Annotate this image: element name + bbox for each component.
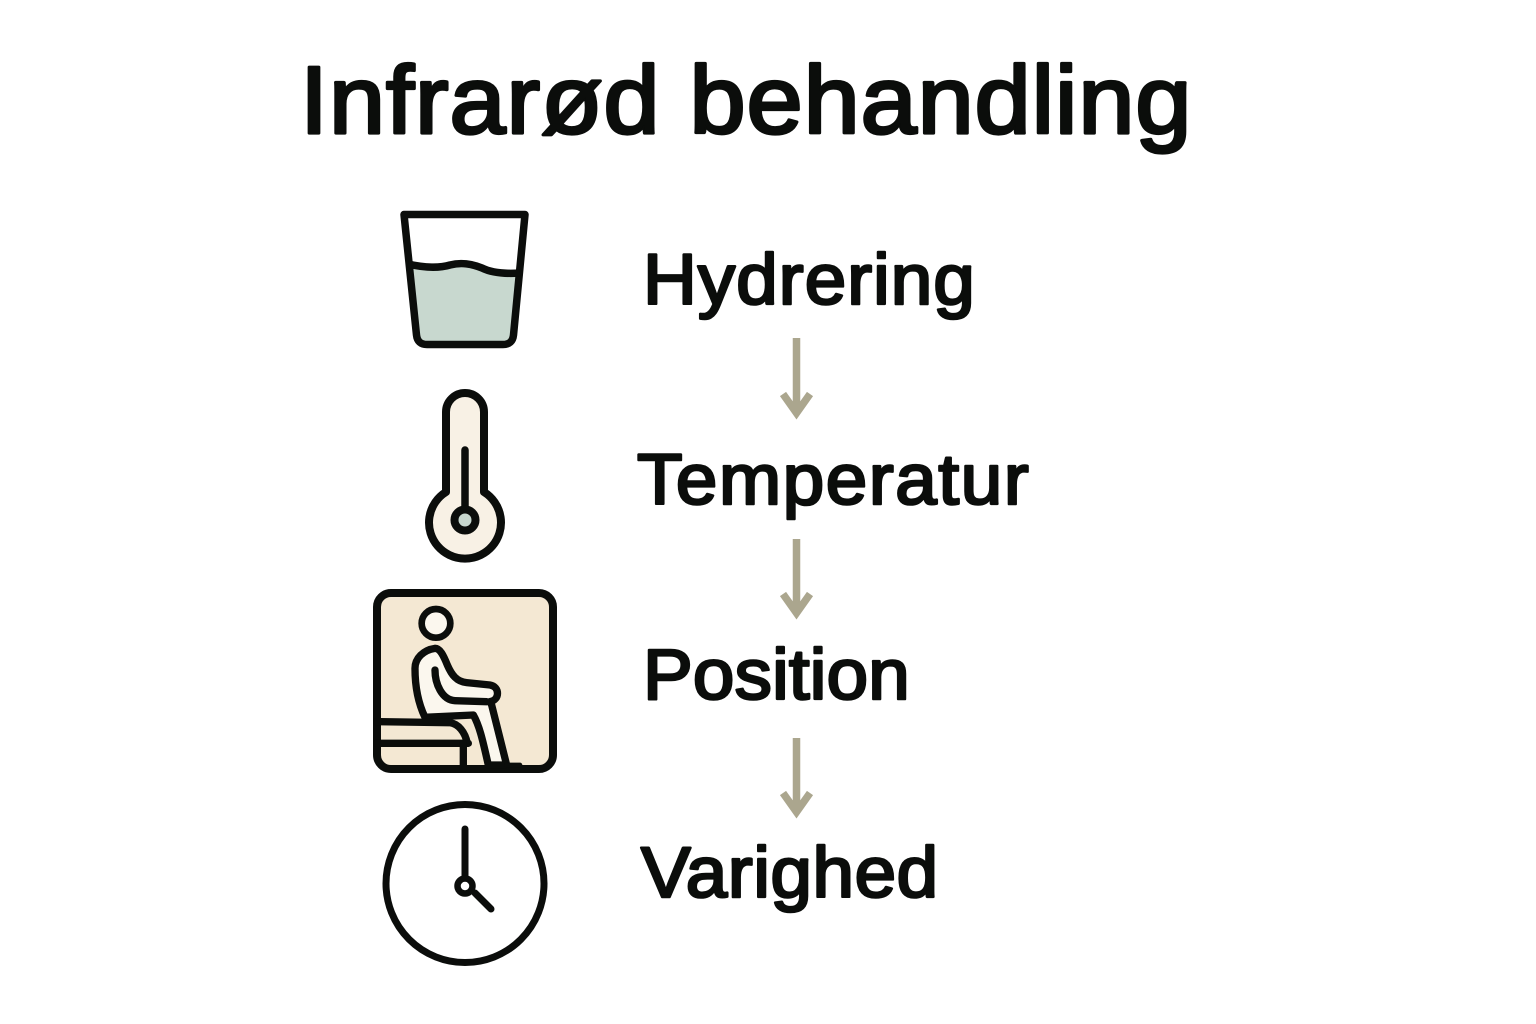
title: Infrarød behandling (300, 46, 1191, 153)
arrow: hydrering to temperatur (783, 338, 810, 413)
arrow: temperatur to position (783, 539, 810, 613)
label: Varighed: Varighed (641, 834, 938, 913)
icon: clock (386, 804, 544, 962)
icon: water glass (404, 214, 525, 345)
icon: seated person (377, 593, 553, 769)
label: Position: Position (643, 636, 910, 715)
label: Hydrering: Hydrering (643, 241, 975, 320)
arrow: position to varighed (783, 738, 810, 812)
label: Temperatur: Temperatur (637, 441, 1029, 520)
icon: thermometer (429, 393, 501, 559)
